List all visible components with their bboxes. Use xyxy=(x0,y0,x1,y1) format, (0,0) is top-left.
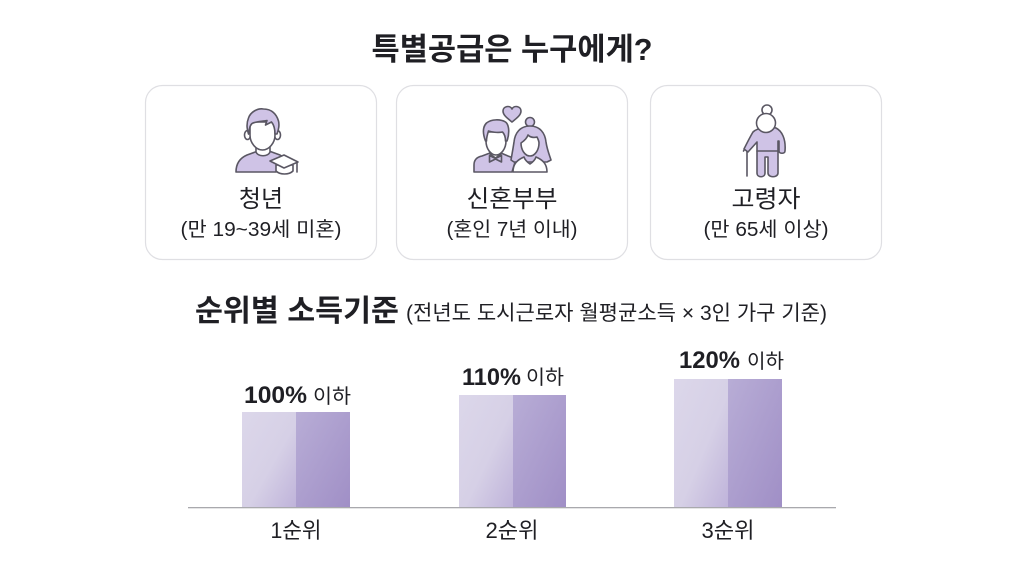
panel: 신혼부부 xyxy=(396,86,628,260)
icon: graduate xyxy=(236,109,298,174)
category label: 3순위: 3순위 xyxy=(702,518,754,543)
section heading xyxy=(195,295,827,328)
panel: 청년 xyxy=(146,86,376,260)
label: 청년: 청년 xyxy=(239,186,283,213)
bar: 3순위 xyxy=(674,347,784,507)
detail: 고령자: (만 65세 이상) xyxy=(704,218,828,241)
bar: 1순위: 이하 xyxy=(313,385,351,408)
panel: 고령자 xyxy=(650,86,882,260)
bar: 1순위 xyxy=(242,382,351,507)
bar: 2순위 xyxy=(459,364,566,507)
bar: 2순위: 110% xyxy=(462,364,521,391)
bar: 3순위: 이하 xyxy=(747,350,784,373)
bar chart xyxy=(188,347,836,543)
section heading: (전년도 도시근로자 월평균소득 × 3인 가구 기준) xyxy=(406,302,827,325)
detail: 신혼부부: (혼인 7년 이내) xyxy=(446,218,578,241)
section heading: 순위별 소득기준 xyxy=(195,295,399,328)
bar: 2순위: 이하 xyxy=(526,366,564,389)
category label: 2순위: 2순위 xyxy=(486,518,538,543)
bar: 3순위: 120% xyxy=(679,347,740,374)
icon: senior xyxy=(744,105,785,177)
label: 신혼부부: 신혼부부 xyxy=(466,186,558,213)
icon: couple xyxy=(474,107,551,172)
title: 특별공급은 누구에게? xyxy=(372,32,652,67)
category label: 1순위: 1순위 xyxy=(270,518,322,543)
detail: 청년: (만 19~39세 미혼) xyxy=(180,218,342,241)
label: 고령자: 고령자 xyxy=(732,186,800,213)
axis line xyxy=(188,507,836,508)
bar: 1순위: 100% xyxy=(244,382,307,409)
